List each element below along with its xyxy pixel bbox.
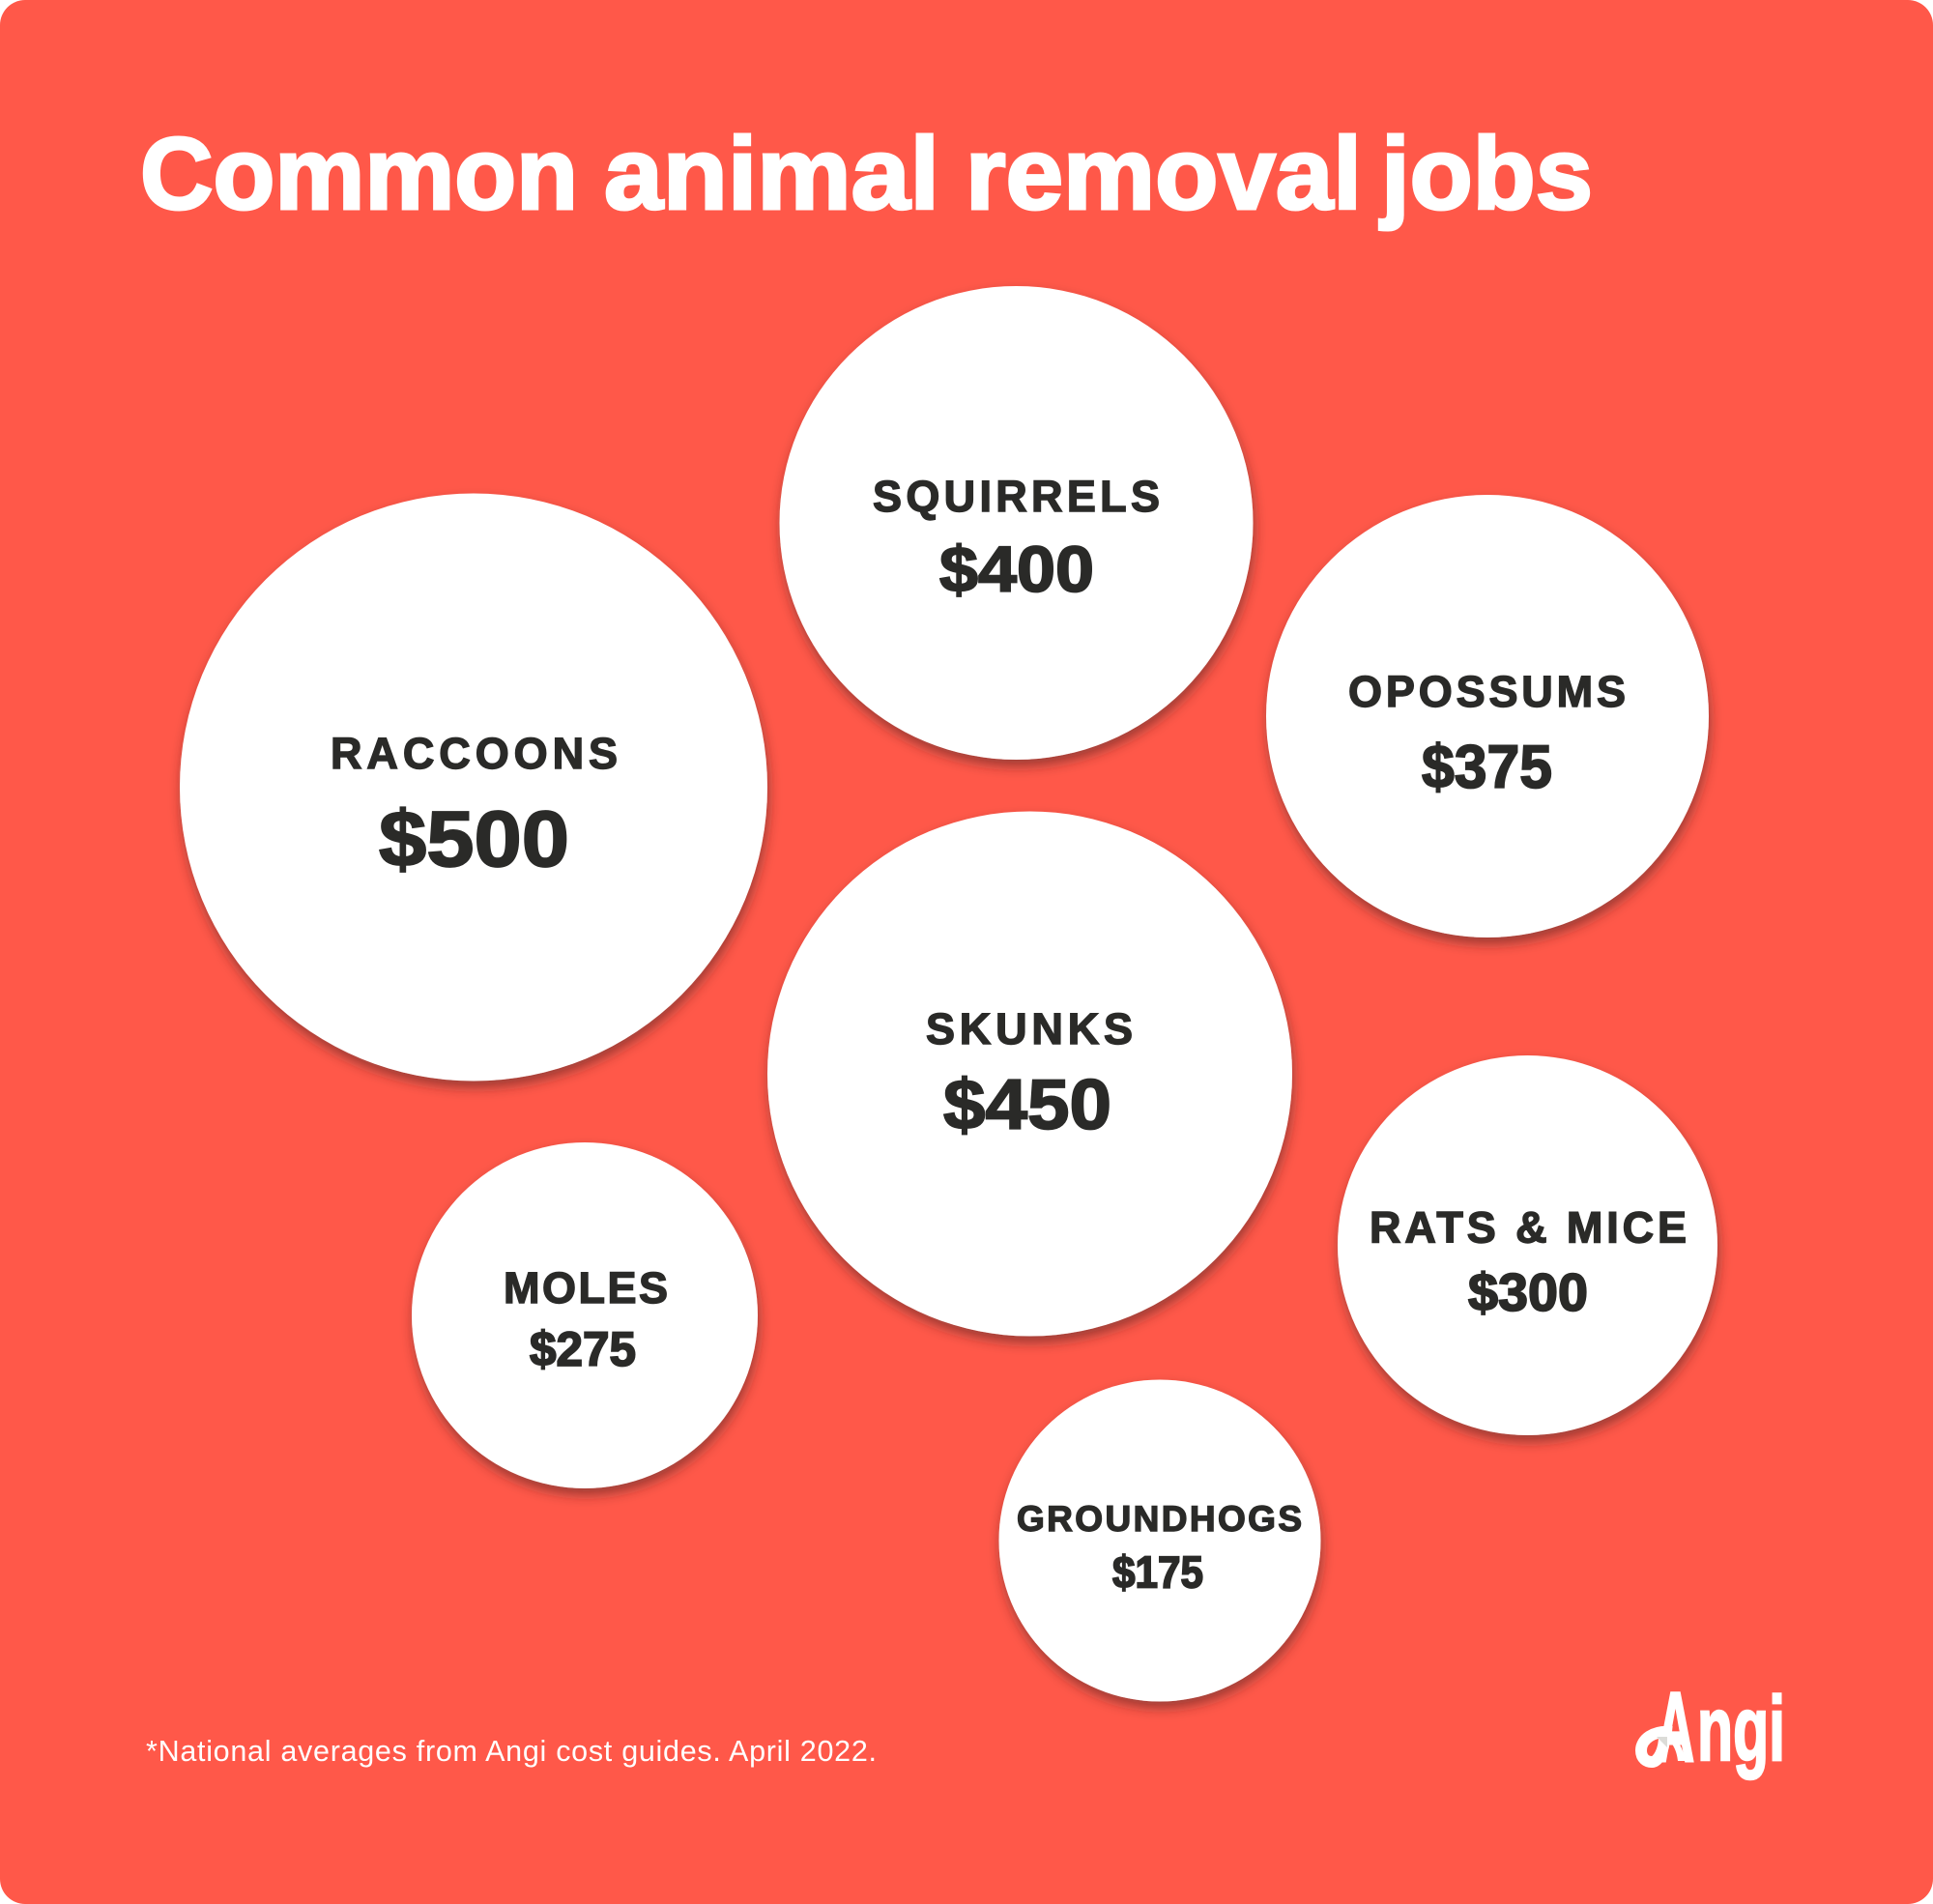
label: moles: MOLES [504, 1263, 668, 1313]
bubble: moles [412, 1142, 758, 1488]
label: raccoons: RACCOONS [331, 729, 618, 778]
price: rats and mice: $300 [1468, 1262, 1588, 1322]
title: animal [604, 117, 939, 231]
logo: Angi [1641, 1672, 1785, 1782]
label: opossums: OPOSSUMS [1348, 667, 1626, 716]
bubble: raccoons [180, 493, 767, 1081]
logo: Angi: A [1657, 1672, 1694, 1782]
label: squirrels: SQUIRRELS [873, 472, 1160, 521]
label: groundhogs: GROUNDHOGS [1017, 1499, 1302, 1539]
title: Common [140, 117, 578, 231]
title: removal [966, 117, 1362, 231]
bubble: opossums [1266, 495, 1709, 938]
title: jobs [1379, 117, 1593, 231]
title [140, 117, 1593, 231]
bubble: squirrels [779, 286, 1253, 760]
label: skunks: SKUNKS [926, 1004, 1133, 1053]
bubble: rats and mice [1338, 1055, 1717, 1435]
label: rats and mice: RATS & MICE [1370, 1202, 1687, 1253]
bubble: groundhogs [999, 1380, 1320, 1701]
price: skunks: $450 [943, 1066, 1111, 1144]
price: opossums: $375 [1422, 734, 1552, 801]
price: moles: $275 [530, 1322, 636, 1376]
price: raccoons: $500 [379, 795, 569, 883]
price: squirrels: $400 [939, 534, 1094, 606]
logo: Angi: ngi [1697, 1678, 1785, 1780]
price: groundhogs: $175 [1112, 1546, 1203, 1597]
footnote: *National averages from Angi cost guides. April 2022. [146, 1735, 877, 1768]
bubble: skunks [767, 812, 1292, 1336]
